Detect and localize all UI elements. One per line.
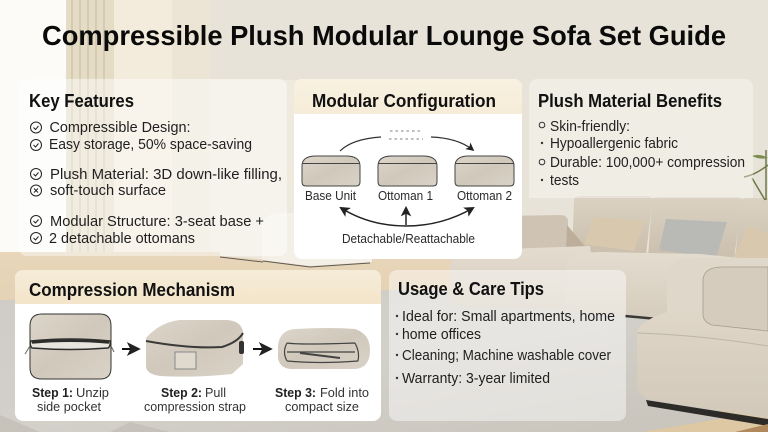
heading: modular configuration: Modular Configuration [312,91,496,111]
feature list: 2 detachable ottomans [49,231,195,247]
seats [449,246,600,310]
front sectional [637,305,768,418]
heading: compression mechanism: Compression Mechanism [29,280,235,300]
step labels: Step 1: [32,385,73,400]
heading: plush material benefits: Plush Material Benefits [538,91,722,111]
icon: step 3 folded bag [278,328,370,369]
step labels: Pull [205,385,226,400]
tips list: Ideal for: Small apartments, home [402,309,615,325]
curtain [0,0,66,255]
arrow: step 1 to 2 [122,348,138,350]
panel: compression mechanism [15,270,381,421]
unit labels: Ottoman 1 [378,189,433,203]
benefits list: Skin-friendly: [550,119,630,135]
tips list: Warranty: 3-year limited [402,371,550,387]
benefits list: Durable: 100,000+ compression [550,155,745,171]
icon: step 1 unzipped bag [25,314,114,379]
pillows [584,217,644,251]
arrow: step 2 to 3 [253,348,270,350]
background ottomans [220,208,300,262]
caption: detachable: Detachable/Reattachable [342,232,475,246]
feature list: Plush Material: 3D down-like filling, [50,167,282,183]
heading: key features: Key Features [29,91,134,111]
unit labels: Ottoman 2 [457,189,512,203]
panel: plush material benefits [529,79,753,198]
icon: ottoman 2 [455,156,514,186]
rug [0,290,725,432]
benefits list [539,119,745,189]
title: Compressible Plush Modular Lounge Sofa Set Guide [42,20,726,51]
panel: key features [19,79,287,256]
step labels: compact size [285,399,359,414]
step labels: compression strap [144,399,246,414]
panel: usage and care tips [389,270,626,421]
floor [0,252,768,432]
feature list [30,120,282,247]
step labels: Unzip [76,385,109,400]
heading: usage and care tips: Usage & Care Tips [398,279,544,299]
tips list: home offices [402,327,481,343]
icon: base unit [302,156,360,186]
step labels: Step 3: [275,385,316,400]
tips list: Cleaning; Machine washable cover [402,348,611,364]
arrow: top arc [340,137,473,151]
benefits list: Hypoallergenic fabric [550,136,678,152]
arrows: detach and reattach [341,208,473,226]
step labels [32,385,369,414]
benefits list: tests [550,173,579,189]
feature list: Modular Structure: 3-seat base + [50,214,264,230]
feature list: soft-touch surface [50,183,166,199]
feature list: Compressible Design: [50,120,190,136]
unit labels [305,189,512,203]
plant [744,150,768,200]
unit labels: Base Unit [305,189,356,203]
diagram placeholder label [389,131,423,139]
icon: step 2 strap bag [146,320,244,377]
step labels: Fold into [320,385,369,400]
sofa [572,196,652,254]
step labels: side pocket [37,399,101,414]
feature list: Easy storage, 50% space-saving [49,137,252,153]
panel: modular configuration [294,79,522,259]
tips list [396,309,615,387]
step labels: Step 2: [161,385,202,400]
icon: ottoman 1 [378,156,437,186]
